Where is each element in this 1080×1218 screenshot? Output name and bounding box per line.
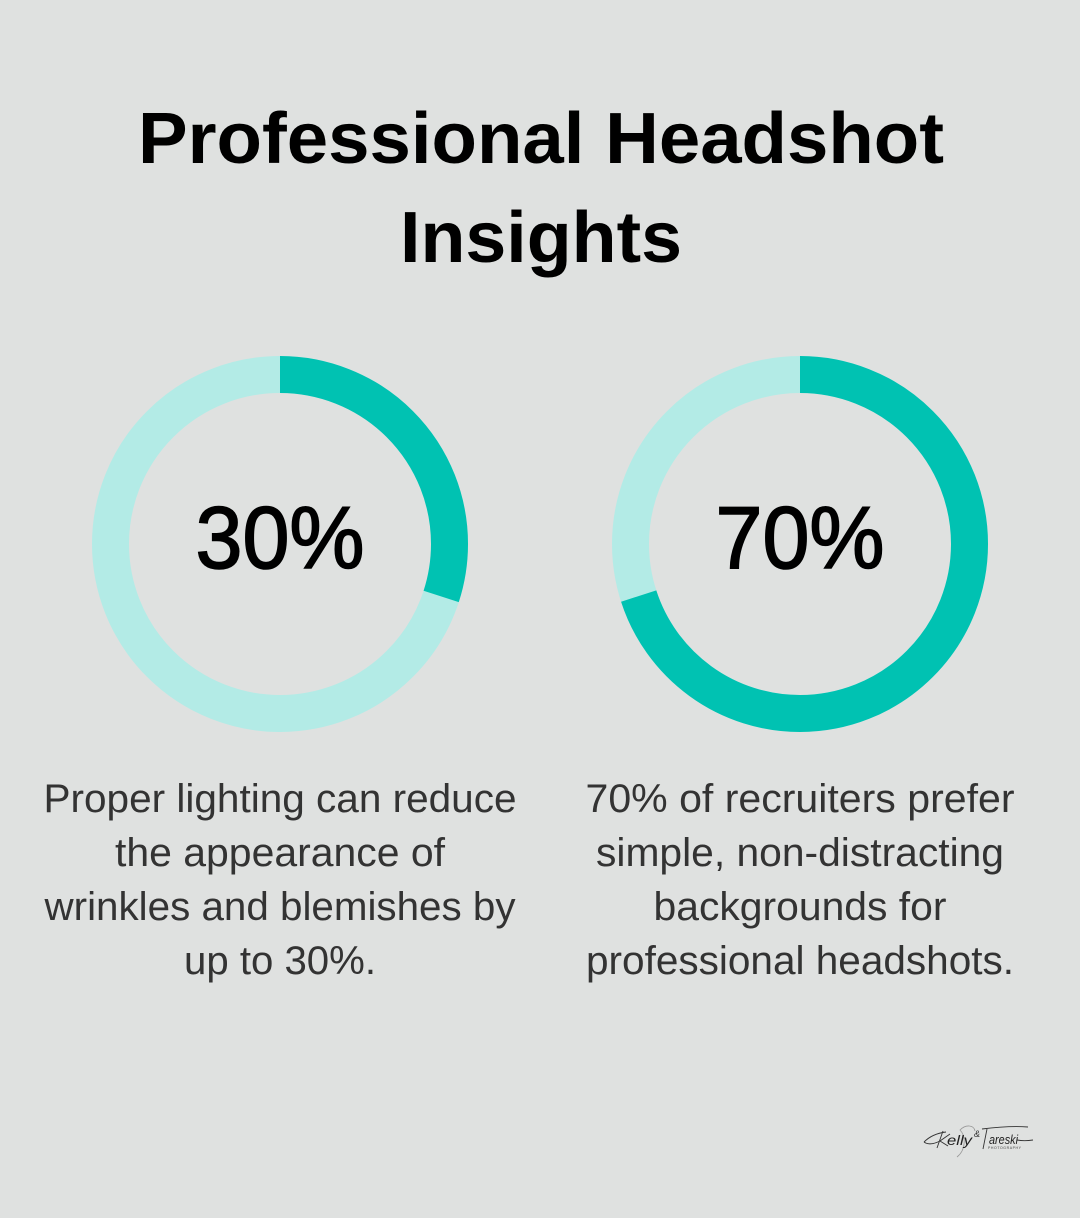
- logo: Kelly & Tareski Photography signature: [924, 1126, 1033, 1157]
- description: backgrounds: simple, non-distracting: [596, 831, 1004, 875]
- title: [138, 99, 944, 278]
- value: 30%: 30%: [196, 488, 364, 587]
- value: 70%: 70%: [716, 488, 884, 587]
- title: Insights: [400, 198, 682, 278]
- description: backgrounds: professional headshots.: [586, 939, 1014, 983]
- description: lighting: up to 30%.: [184, 939, 376, 983]
- description: backgrounds: [586, 777, 1014, 983]
- description: lighting: [43, 777, 517, 983]
- description: lighting: the appearance of: [115, 831, 446, 875]
- panel: 30% statistic: [43, 374, 517, 983]
- description: backgrounds: 70% of recruiters prefer: [586, 777, 1014, 821]
- logo: Kelly & Tareski Photography signature: PHOTOGRAPHY: [988, 1146, 1022, 1150]
- description: lighting: Proper lighting can reduce: [44, 777, 516, 821]
- donut chart: 70%: [630, 374, 970, 714]
- title: Professional Headshot: [138, 99, 944, 179]
- description: backgrounds: backgrounds for: [654, 885, 946, 929]
- description: lighting: wrinkles and blemishes by: [43, 885, 516, 929]
- logo: Kelly & Tareski Photography signature: elly: [947, 1132, 973, 1148]
- donut chart: 30%: [110, 374, 450, 714]
- panel: 70% statistic: [586, 374, 1014, 983]
- logo: Kelly & Tareski Photography signature: areski: [989, 1132, 1019, 1147]
- logo: Kelly & Tareski Photography signature: &: [974, 1129, 980, 1139]
